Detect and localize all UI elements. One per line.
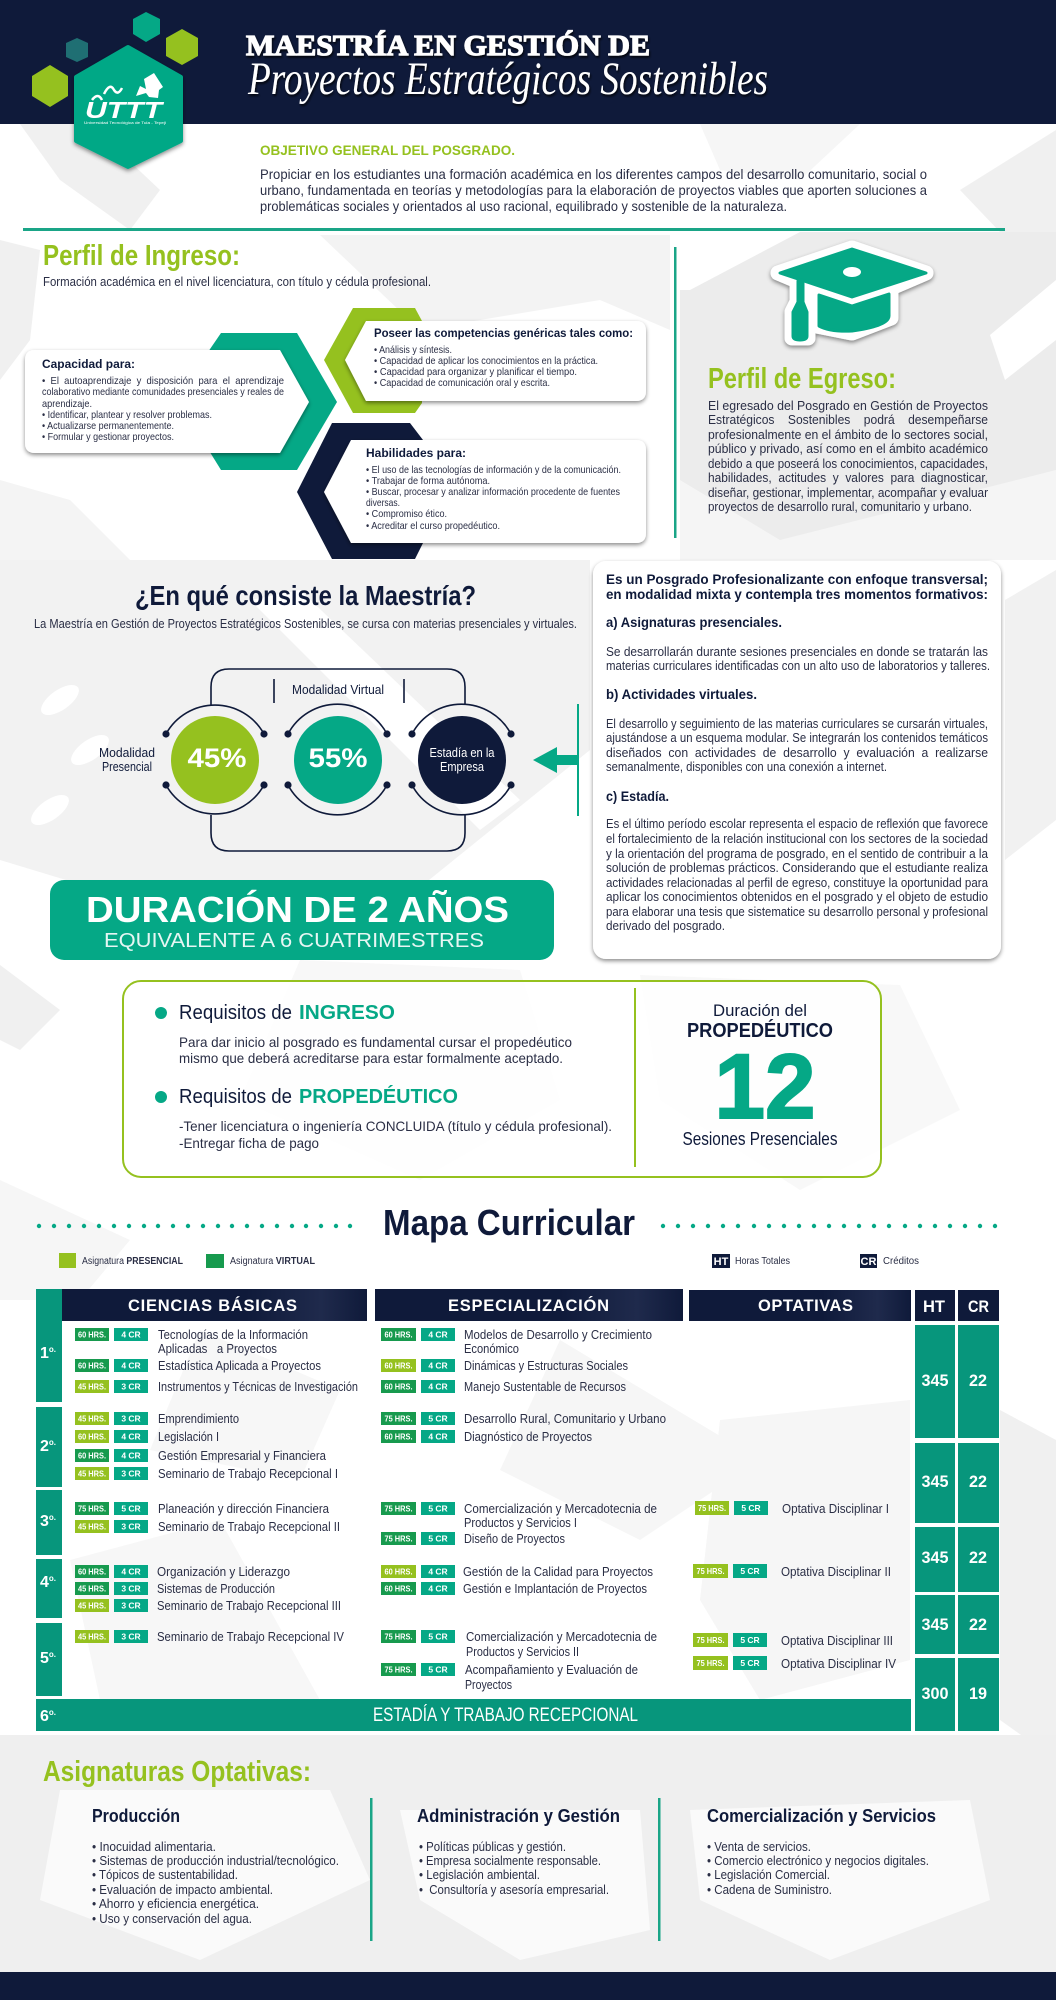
row: seminario I: 45 HRS. bbox=[78, 1468, 106, 1478]
row: seminario IV: 45 HRS. bbox=[78, 1632, 106, 1642]
table headers: ESPECIALIZACIÓN bbox=[448, 1296, 609, 1315]
row: comercialización II: Productos y Servicios II bbox=[466, 1645, 579, 1659]
row: modelos de desarrollo: Económico bbox=[464, 1342, 519, 1356]
panel: requisitos: mismo que deberá acreditarse para estar formalmente aceptado. bbox=[179, 1050, 563, 1066]
totals HT and CR: 345 bbox=[922, 1548, 948, 1567]
heading: perfil de egreso: Perfil de Egreso: bbox=[708, 363, 896, 395]
chevron: capacidad: aprendizaje. bbox=[42, 398, 92, 410]
duration banner: EQUIVALENTE A 6 CUATRIMESTRES bbox=[104, 930, 484, 952]
row: seminario III bbox=[75, 1599, 341, 1613]
row: planeación: 75 HRS. bbox=[78, 1504, 106, 1514]
panel: formative moments: derivado del posgrado. bbox=[606, 918, 725, 933]
panel: requisitos: Sesiones Presenciales bbox=[682, 1129, 838, 1149]
list: producción: • Uso y conservación del agua. bbox=[92, 1912, 252, 1926]
row: optativa I: 5 CR bbox=[741, 1503, 761, 1513]
row: planeación: Planeación y dirección Financiera bbox=[158, 1502, 329, 1516]
panel: formative moments: El desarrollo y seguimiento de las materias curriculares se cursarán virtuales, bbox=[606, 716, 988, 731]
list: comercialización y servicios: • Venta de servicios. bbox=[707, 1840, 811, 1854]
row: diseño de proyectos: 5 CR bbox=[428, 1534, 448, 1544]
logo hexagons bbox=[32, 12, 198, 167]
panel: formative moments: materias curriculares identificadas con un alto uso de laboratorios y talleres. bbox=[606, 658, 990, 673]
row: optativa II: 75 HRS. bbox=[696, 1566, 724, 1576]
row: estadística: 60 HRS. bbox=[78, 1360, 106, 1370]
semester column: o. bbox=[49, 1574, 56, 1583]
panel: formative moments: ajustándose a un esquema modular. Se integrarán los contenidos temáticos bbox=[606, 730, 988, 745]
semester column: 1 bbox=[40, 1345, 49, 1362]
row: diseño de proyectos bbox=[381, 1532, 565, 1546]
panel: formative moments: solución de problemas prácticos. Considerando que el estudiante realiza bbox=[606, 860, 989, 875]
row: instrumentos: 3 CR bbox=[121, 1382, 141, 1392]
row: gestión empresarial: 4 CR bbox=[121, 1450, 141, 1460]
table headers bbox=[62, 1289, 999, 1321]
chevron: capacidad bbox=[25, 333, 337, 470]
list: administración y gestión: • Políticas públicas y gestión. bbox=[419, 1840, 566, 1854]
panel: requisitos: Duración del bbox=[713, 1001, 807, 1020]
bar: sexto cuatrimestre: 6 bbox=[40, 1708, 49, 1725]
list: producción: Producción bbox=[92, 1806, 180, 1826]
panel: formative moments: b) Actividades virtuales. bbox=[606, 687, 757, 702]
duration banner bbox=[50, 880, 554, 960]
legend: Asignatura PRESENCIAL bbox=[82, 1256, 183, 1267]
chevron: competencias: • Capacidad para organizar y planificar el tiempo. bbox=[374, 366, 577, 378]
heading: en qué consiste: ¿En qué consiste la Maestría? bbox=[135, 580, 476, 611]
row: sistemas de producción: 45 HRS. bbox=[78, 1584, 106, 1594]
panel: requisitos: Requisitos de bbox=[179, 1086, 292, 1108]
ingreso subtitle: Formación académica en el nivel licenciatura, con título y cédula profesional. bbox=[43, 274, 431, 289]
row: desarrollo rural: 75 HRS. bbox=[384, 1414, 412, 1424]
row: comercialización II: Comercialización y Mercadotecnia de bbox=[466, 1630, 657, 1644]
row: dinámicas: Dinámicas y Estructuras Sociales bbox=[464, 1359, 628, 1373]
column: ciencias básicas rows bbox=[75, 1328, 358, 1644]
row: dinámicas: 60 HRS. bbox=[384, 1360, 412, 1370]
egreso text: público y privado, así como en el ámbito académico bbox=[708, 441, 988, 456]
panel: requisitos: Para dar inicio al posgrado es fundamental cursar el propedéutico bbox=[179, 1034, 572, 1050]
row: desarrollo rural: 5 CR bbox=[428, 1414, 448, 1424]
objective text: urbano, fundamentada en teorías y metodologías para la elaboración de proyectos viables que aporten soluciones a bbox=[260, 182, 927, 198]
row: optativa IV: Optativa Disciplinar IV bbox=[781, 1657, 897, 1671]
row: gestión e implantación: Gestión e Implantación de Proyectos bbox=[463, 1582, 647, 1596]
row: comercialización I: Productos y Servicios I bbox=[464, 1516, 577, 1530]
row: seminario IV bbox=[75, 1630, 345, 1644]
row: optativa III: 75 HRS. bbox=[696, 1635, 724, 1645]
row: optativa III: Optativa Disciplinar III bbox=[781, 1634, 893, 1648]
table headers: CIENCIAS BÁSICAS bbox=[128, 1296, 297, 1315]
legend: Horas Totales bbox=[735, 1256, 790, 1267]
row: gestión de la calidad: Gestión de la Calidad para Proyectos bbox=[463, 1565, 653, 1579]
row: gestión empresarial: Gestión Empresarial y Financiera bbox=[158, 1449, 326, 1463]
logo: UTTT: Universidad Tecnológica de Tula - Tepeji bbox=[84, 121, 166, 125]
modality diagram: Estadía en la bbox=[430, 745, 495, 760]
modality diagram: Presencial bbox=[102, 759, 152, 774]
totals HT and CR: 300 bbox=[922, 1684, 948, 1703]
row: sistemas de producción: 3 CR bbox=[121, 1584, 141, 1594]
row: desarrollo rural: Desarrollo Rural, Comunitario y Urbano bbox=[464, 1412, 666, 1426]
row: estadística: 4 CR bbox=[121, 1360, 141, 1370]
row: diagnóstico bbox=[381, 1430, 592, 1444]
row: optativa I bbox=[695, 1501, 889, 1516]
egreso text bbox=[708, 398, 989, 514]
list: producción: • Tópicos de sustentabilidad. bbox=[92, 1868, 238, 1882]
bar: sexto cuatrimestre: ESTADÍA Y TRABAJO RECEPCIONAL bbox=[373, 1705, 638, 1726]
row: comercialización II bbox=[381, 1630, 657, 1659]
header band bbox=[0, 0, 1056, 124]
row: acompañamiento: 5 CR bbox=[428, 1664, 448, 1674]
list: producción bbox=[92, 1806, 339, 1926]
row: tecnologías de la información: Tecnologías de la Información bbox=[158, 1328, 308, 1342]
panel: formative moments: aplicar los conocimientos obtenidos en el posgrado y el objeto de estudio bbox=[606, 889, 988, 904]
list: comercialización y servicios: • Comercio electrónico y negocios digitales. bbox=[707, 1854, 929, 1868]
row: seminario III: Seminario de Trabajo Recepcional III bbox=[157, 1599, 341, 1613]
table headers: CR bbox=[968, 1298, 989, 1316]
title: MAESTRÍA EN GESTIÓN DE bbox=[246, 31, 650, 62]
row: diseño de proyectos: Diseño de Proyectos bbox=[464, 1532, 565, 1546]
icon: graduation cap bbox=[778, 248, 926, 340]
chevron: capacidad: • Actualizarse permanentemente. bbox=[42, 420, 174, 432]
row: organización: 60 HRS. bbox=[78, 1566, 106, 1576]
legend: Créditos bbox=[883, 1256, 919, 1267]
objective text: problemáticas sociales y orientados al uso racional, equilibrado y sostenible de la naturaleza. bbox=[260, 198, 787, 214]
row: modelos de desarrollo: 4 CR bbox=[428, 1330, 448, 1340]
row: optativa I: 75 HRS. bbox=[698, 1503, 726, 1513]
list: producción: • Sistemas de producción industrial/tecnológico. bbox=[92, 1854, 339, 1868]
panel: formative moments: y la orientación del programa de posgrado, en el sentido de contribuir a la bbox=[606, 846, 989, 861]
panel: requisitos: 12 bbox=[714, 1036, 816, 1138]
semester column bbox=[36, 1289, 62, 1696]
row: comercialización I bbox=[381, 1502, 657, 1530]
arrow bbox=[533, 704, 579, 816]
row: manejo sustentable: Manejo Sustentable de Recursos bbox=[464, 1380, 626, 1394]
egreso text: Estratégicos Sostenibles podrá desempeñarse bbox=[708, 412, 988, 427]
chevron: competencias: • Análisis y síntesis. bbox=[374, 344, 452, 356]
row: seminario I: Seminario de Trabajo Recepcional I bbox=[158, 1467, 338, 1481]
row: acompañamiento: 75 HRS. bbox=[384, 1664, 412, 1674]
row: modelos de desarrollo bbox=[381, 1328, 652, 1356]
chevron: competencias: • Capacidad de aplicar los conocimientos en la práctica. bbox=[374, 355, 598, 367]
egreso text: diseñar, gestionar, implementar, acompañar y evaluar bbox=[708, 485, 989, 500]
egreso text: habilidades, actitudes y valores para diagnosticar, bbox=[708, 470, 988, 485]
row: emprendimiento: Emprendimiento bbox=[158, 1412, 239, 1426]
row: organización: 4 CR bbox=[121, 1566, 141, 1576]
totals HT and CR: 22 bbox=[969, 1472, 987, 1491]
list: producción: • Evaluación de impacto ambiental. bbox=[92, 1883, 273, 1897]
chevron: habilidades: • El uso de las tecnologías de información y de la comunicación. bbox=[366, 464, 621, 476]
row: comercialización II: 5 CR bbox=[428, 1632, 448, 1642]
row: modelos de desarrollo: 60 HRS. bbox=[384, 1330, 412, 1340]
list: administración y gestión bbox=[417, 1806, 620, 1897]
row: organización bbox=[75, 1565, 290, 1579]
chevron: competencias: Poseer las competencias genéricas tales como: bbox=[374, 328, 633, 340]
row: legislación I: 4 CR bbox=[121, 1432, 141, 1442]
chevron: habilidades: • Compromiso ético. bbox=[366, 508, 447, 520]
row: acompañamiento: Proyectos bbox=[465, 1678, 512, 1692]
row: tecnologías de la información bbox=[75, 1328, 308, 1356]
chevron: competencias bbox=[324, 308, 646, 413]
chevron: capacidad: • El autoaprendizaje y disposición para el aprendizaje bbox=[42, 375, 284, 387]
semester column: 3 bbox=[40, 1513, 49, 1530]
panel: formative moments: Se desarrollarán durante sesiones presenciales en donde se tratarán las bbox=[606, 644, 988, 659]
modality diagram: 45% bbox=[188, 743, 246, 773]
panel: formative moments: el fortalecimiento de la relación institucional con los sectores de la sociedad bbox=[606, 831, 988, 846]
totals HT and CR: 22 bbox=[969, 1615, 987, 1634]
row: optativa II: Optativa Disciplinar II bbox=[781, 1565, 891, 1579]
row: gestión de la calidad: 4 CR bbox=[428, 1566, 448, 1576]
row: manejo sustentable bbox=[381, 1380, 626, 1394]
row: legislación I: Legislación I bbox=[158, 1430, 219, 1444]
row: diseño de proyectos: 75 HRS. bbox=[384, 1534, 412, 1544]
panel: requisitos: INGRESO bbox=[299, 1002, 395, 1024]
chevron: habilidades: • Buscar, procesar y analizar información procedente de fuentes bbox=[366, 486, 620, 498]
row: legislación I bbox=[75, 1430, 219, 1444]
row: seminario IV: 3 CR bbox=[121, 1632, 141, 1642]
modality diagram: Modalidad Virtual bbox=[292, 682, 384, 697]
table headers: OPTATIVAS bbox=[758, 1297, 853, 1315]
modality diagram: 55% bbox=[308, 743, 368, 773]
row: comercialización II: 75 HRS. bbox=[384, 1632, 412, 1642]
bar: sexto cuatrimestre bbox=[36, 1699, 911, 1731]
egreso text: El egresado del Posgrado en Gestión de Proyectos bbox=[708, 398, 988, 413]
row: seminario II bbox=[75, 1520, 340, 1534]
row: optativa IV bbox=[693, 1656, 897, 1671]
row: comercialización I: 5 CR bbox=[428, 1504, 448, 1514]
row: seminario II: Seminario de Trabajo Recepcional II bbox=[158, 1520, 340, 1534]
row: emprendimiento bbox=[75, 1412, 239, 1426]
duration banner: DURACIÓN DE 2 AÑOS bbox=[86, 888, 509, 930]
row: sistemas de producción bbox=[75, 1582, 275, 1596]
row: seminario I bbox=[75, 1467, 338, 1481]
row: acompañamiento: Acompañamiento y Evaluación de bbox=[465, 1663, 638, 1677]
list: comercialización y servicios: • Cadena de Suministro. bbox=[707, 1883, 832, 1897]
row: optativa IV: 5 CR bbox=[740, 1658, 760, 1668]
legend: HT bbox=[714, 1256, 729, 1268]
chevron: capacidad: colaborativo mediante comunidades presenciales y reales de bbox=[42, 386, 284, 398]
row: manejo sustentable: 4 CR bbox=[428, 1382, 448, 1392]
row: dinámicas: 4 CR bbox=[428, 1360, 448, 1370]
list: administración y gestión: • Empresa socialmente responsable. bbox=[419, 1854, 601, 1868]
row: instrumentos bbox=[75, 1380, 358, 1394]
row: gestión de la calidad: 60 HRS. bbox=[384, 1566, 412, 1576]
legend: CR bbox=[861, 1256, 876, 1268]
row: comercialización I: 75 HRS. bbox=[384, 1504, 412, 1514]
semester column: o. bbox=[49, 1650, 56, 1659]
row: seminario IV: Seminario de Trabajo Recepcional IV bbox=[157, 1630, 345, 1644]
totals HT and CR: 19 bbox=[969, 1684, 987, 1703]
row: seminario III: 3 CR bbox=[121, 1600, 141, 1610]
row: gestión e implantación: 4 CR bbox=[428, 1584, 448, 1594]
row: optativa III: 5 CR bbox=[740, 1635, 760, 1645]
row: gestión empresarial: 60 HRS. bbox=[78, 1450, 106, 1460]
legend bbox=[59, 1253, 919, 1268]
chevron: habilidades bbox=[297, 423, 646, 559]
column: especialización rows bbox=[381, 1328, 666, 1692]
row: desarrollo rural bbox=[381, 1412, 666, 1426]
heading: mapa curricular: Mapa Curricular bbox=[383, 1202, 635, 1243]
footer band bbox=[0, 1972, 1056, 2000]
modality diagram bbox=[99, 669, 515, 851]
list: comercialización y servicios: Comercialización y Servicios bbox=[707, 1806, 936, 1826]
row: instrumentos: Instrumentos y Técnicas de Investigación bbox=[158, 1380, 358, 1394]
modality diagram: Empresa bbox=[440, 759, 485, 774]
panel: requisitos: PROPEDÉUTICO bbox=[299, 1085, 458, 1108]
panel: formative moments: diseñados con actividades de desarrollo y evaluación a realizarse bbox=[606, 745, 988, 760]
list: comercialización y servicios: • Legislación Comercial. bbox=[707, 1868, 830, 1882]
title: Proyectos Estratégicos Sostenibles bbox=[247, 53, 768, 105]
row: optativa II: 5 CR bbox=[740, 1566, 760, 1576]
semester column: o. bbox=[49, 1345, 56, 1354]
panel: requisitos: -Entregar ficha de pago bbox=[179, 1135, 319, 1151]
chevron: habilidades: diversas. bbox=[366, 497, 400, 509]
panel: formative moments: en modalidad mixta y contempla tres momentos formativos: bbox=[606, 587, 988, 602]
row: legislación I: 60 HRS. bbox=[78, 1432, 106, 1442]
row: tecnologías de la información: 4 CR bbox=[121, 1330, 141, 1340]
row: optativa I: Optativa Disciplinar I bbox=[782, 1502, 889, 1516]
egreso text: proyectos de desarrollo rural, comunitario y urbano. bbox=[708, 499, 972, 514]
panel: formative moments bbox=[593, 561, 1001, 959]
row: organización: Organización y Liderazgo bbox=[157, 1565, 290, 1579]
totals HT and CR: 345 bbox=[922, 1615, 948, 1634]
consiste subtitle: La Maestría en Gestión de Proyectos Estratégicos Sostenibles, se cursa con materias presenciales y virtuales. bbox=[34, 617, 577, 631]
panel: formative moments: semanalmente, disponibles con una conexión a internet. bbox=[606, 759, 887, 774]
panel: formative moments: c) Estadía. bbox=[606, 789, 669, 804]
egreso text: debido a que poseerá los conocimientos, capacidades, bbox=[708, 456, 988, 471]
row: gestión e implantación: 60 HRS. bbox=[384, 1584, 412, 1594]
panel: formative moments: para elaborar una tesis que sistematice su desarrollo personal y profesional bbox=[606, 904, 988, 919]
panel: requisitos: Requisitos de bbox=[179, 1002, 292, 1024]
egreso text: profesionalmente en el ámbito de lo sectores social, bbox=[708, 427, 988, 442]
list: administración y gestión: • Consultoría y asesoría empresarial. bbox=[419, 1883, 609, 1897]
row: seminario II: 3 CR bbox=[121, 1522, 141, 1532]
row: estadística: Estadística Aplicada a Proyectos bbox=[158, 1359, 321, 1373]
panel: requisitos: -Tener licenciatura o ingeniería CONCLUIDA (título y cédula profesional). bbox=[179, 1118, 612, 1134]
row: diagnóstico: 4 CR bbox=[428, 1432, 448, 1442]
row: instrumentos: 45 HRS. bbox=[78, 1382, 106, 1392]
list: administración y gestión: • Legislación ambiental. bbox=[419, 1868, 540, 1882]
row: modelos de desarrollo: Modelos de Desarrollo y Crecimiento bbox=[464, 1328, 652, 1342]
list: administración y gestión: Administración y Gestión bbox=[417, 1806, 620, 1826]
panel: formative moments: a) Asignaturas presenciales. bbox=[606, 615, 782, 630]
title bbox=[246, 31, 768, 105]
heading: perfil de ingreso: Perfil de Ingreso: bbox=[43, 240, 240, 272]
semester column: o. bbox=[49, 1513, 56, 1522]
semester column: 5 bbox=[40, 1650, 49, 1667]
row: seminario II: 45 HRS. bbox=[78, 1522, 106, 1532]
chevron: competencias: • Capacidad de comunicación oral y escrita. bbox=[374, 377, 550, 389]
row: planeación bbox=[75, 1502, 329, 1516]
panel: formative moments: Es el último período escolar representa el espacio de reflexión que favorece bbox=[606, 816, 988, 831]
list: producción: • Inocuidad alimentaria. bbox=[92, 1840, 216, 1854]
heading: asignaturas optativas: Asignaturas Optativas: bbox=[43, 1756, 311, 1788]
table headers: HT bbox=[923, 1298, 945, 1316]
logo: UTTT bbox=[84, 73, 166, 125]
row: optativa II bbox=[693, 1564, 891, 1579]
row: comercialización I: Comercialización y Mercadotecnia de bbox=[464, 1502, 657, 1516]
totals HT and CR: 22 bbox=[969, 1548, 987, 1567]
objective text bbox=[260, 166, 927, 214]
list: comercialización y servicios bbox=[707, 1806, 936, 1897]
row: gestión de la calidad bbox=[381, 1565, 653, 1579]
chevron: capacidad: • Identificar, plantear y resolver problemas. bbox=[42, 409, 212, 421]
row: seminario I: 3 CR bbox=[121, 1468, 141, 1478]
panel: formative moments: Es un Posgrado Profesionalizante con enfoque transversal; bbox=[606, 572, 988, 587]
row: acompañamiento bbox=[381, 1663, 638, 1692]
chevron: capacidad: Capacidad para: bbox=[42, 359, 135, 371]
chevron: capacidad: • Formular y gestionar proyectos. bbox=[42, 431, 174, 443]
row: estadística bbox=[75, 1359, 321, 1373]
row: dinámicas bbox=[381, 1359, 628, 1373]
logo: UTTT: UTTT bbox=[85, 97, 165, 123]
row: manejo sustentable: 60 HRS. bbox=[384, 1382, 412, 1392]
panel: formative moments: actividades relacionadas al perfil de egreso, constituye la oportunidad para bbox=[606, 875, 989, 890]
column: optativas rows bbox=[693, 1501, 897, 1671]
row: planeación: 5 CR bbox=[121, 1504, 141, 1514]
row: seminario III: 45 HRS. bbox=[78, 1600, 106, 1610]
row: tecnologías de la información: 60 HRS. bbox=[78, 1330, 106, 1340]
modality diagram: Modalidad bbox=[99, 745, 155, 760]
chevron: habilidades: Habilidades para: bbox=[366, 448, 466, 460]
semester column: 2 bbox=[40, 1438, 49, 1455]
row: diagnóstico: Diagnóstico de Proyectos bbox=[464, 1430, 592, 1444]
chevron: habilidades: • Acreditar el curso propedéutico. bbox=[366, 520, 500, 532]
chevron: habilidades: • Trabajar de forma autónoma. bbox=[366, 475, 490, 487]
bar: sexto cuatrimestre: o. bbox=[49, 1708, 56, 1717]
row: optativa III bbox=[693, 1633, 893, 1648]
totals HT and CR bbox=[915, 1325, 999, 1731]
row: tecnologías de la información: Aplicadas a Proyectos bbox=[158, 1342, 277, 1356]
row: optativa IV: 75 HRS. bbox=[696, 1658, 724, 1668]
row: emprendimiento: 45 HRS. bbox=[78, 1414, 106, 1424]
row: emprendimiento: 3 CR bbox=[121, 1414, 141, 1424]
panel: requisitos bbox=[123, 981, 881, 1177]
panel: requisitos: PROPEDÉUTICO bbox=[687, 1019, 833, 1042]
row: diagnóstico: 60 HRS. bbox=[384, 1432, 412, 1442]
row: sistemas de producción: Sistemas de Producción bbox=[157, 1582, 275, 1596]
row: gestión e implantación bbox=[381, 1582, 647, 1596]
list: producción: • Ahorro y eficiencia energética. bbox=[92, 1897, 259, 1911]
legend: Asignatura VIRTUAL bbox=[230, 1256, 315, 1267]
semester column: 4 bbox=[40, 1574, 49, 1591]
objective heading: OBJETIVO GENERAL DEL POSGRADO. bbox=[260, 142, 515, 158]
totals HT and CR: 345 bbox=[922, 1371, 948, 1390]
objective text: Propiciar en los estudiantes una formación académica en los diferentes campos del desarrollo comunitario, social o bbox=[260, 166, 927, 182]
row: gestión empresarial bbox=[75, 1449, 326, 1463]
totals HT and CR: 345 bbox=[922, 1472, 948, 1491]
semester column: o. bbox=[49, 1438, 56, 1447]
totals HT and CR: 22 bbox=[969, 1371, 987, 1390]
